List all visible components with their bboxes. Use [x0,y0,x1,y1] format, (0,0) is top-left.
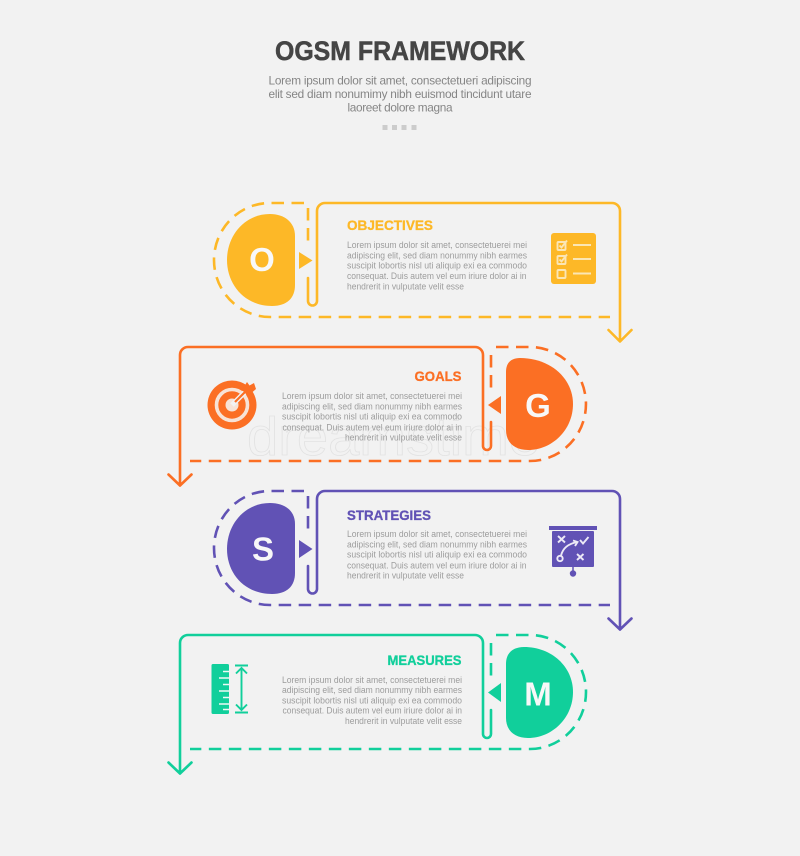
header [268,36,532,130]
body text: suscipit lobortis nisl uti aliquip exi ea commodo [347,550,527,560]
body text: hendrerit in vulputate velit esse [347,571,464,581]
body text: Lorem ipsum dolor sit amet, consectetuerei mei [282,391,462,401]
letter blob [506,647,573,738]
watermark: dreamstime [247,407,540,467]
body text: adipiscing elit, sed diam nonummy nibh earmes [282,401,462,411]
panel: goals [168,347,586,486]
body text [347,240,527,291]
subtitle text: Lorem ipsum dolor sit amet, consectetueri adipiscing [268,74,532,88]
body text: consequat. Duis autem vel eum iriure dolor ai in [347,271,526,281]
solid frame with arrow [308,203,632,342]
title: OGSM FRAMEWORK [275,36,525,66]
pointer triangle [299,540,312,558]
subtitle text [268,74,532,114]
dashed outline [190,635,586,749]
body text: Lorem ipsum dolor sit amet, consectetuerei mei [347,240,527,250]
dashed outline [190,347,586,461]
letter O: O [249,241,275,278]
heading: OBJECTIVES [347,217,433,233]
decorative dots [382,125,416,130]
letter G: G [525,387,551,424]
body text: adipiscing elit, sed diam nonummy nibh earmes [347,250,527,260]
dashed outline [214,203,610,317]
body text: hendrerit in vulputate velit esse [347,281,464,291]
body text: suscipit lobortis nisl uti aliquip exi ea commodo [347,261,527,271]
solid frame with arrow [168,347,491,486]
letter blob [227,214,295,306]
heading: GOALS [414,368,462,384]
letter blob [227,503,295,594]
panel: measures [168,635,586,774]
dashed outline [214,491,610,605]
body text: Lorem ipsum dolor sit amet, consectetuerei mei [282,675,462,685]
subtitle text: elit sed diam nonumimy nibh euismod tincidunt utare [268,87,532,101]
body text: adipiscing elit, sed diam nonummy nibh earmes [347,539,527,549]
body text: hendrerit in vulputate velit esse [345,433,462,443]
pointer triangle [299,252,312,269]
heading: STRATEGIES [347,507,431,523]
body text [282,675,462,726]
body text: adipiscing elit, sed diam nonummy nibh earmes [282,685,462,695]
body text: suscipit lobortis nisl uti aliquip exi ea commodo [282,412,462,422]
solid frame with arrow [168,635,491,774]
heading: MEASURES [388,652,462,668]
body text: hendrerit in vulputate velit esse [345,716,462,726]
letter M: M [524,676,552,712]
body text: suscipit lobortis nisl uti aliquip exi ea commodo [282,695,462,705]
body text [282,391,462,443]
body text: consequat. Duis autem vel eum iriure dolor ai in [347,560,526,570]
body text: consequat. Duis autem vel eum iriure dolor ai in [282,422,462,432]
icon: target with arrow [208,380,256,430]
pointer triangle [488,396,501,414]
subtitle text: laoreet dolore magna [348,100,453,114]
body text: consequat. Duis autem vel eum iriure dolor ai in [282,706,462,716]
icon: strategy board [549,526,597,577]
panel: strategies [214,491,632,630]
panel: objectives [214,203,632,342]
icon: checklist [551,233,596,284]
letter S: S [252,530,274,568]
body text [347,529,527,581]
solid frame with arrow [308,491,632,630]
icon: ruler and height arrow [212,664,248,714]
letter blob [506,358,573,450]
body text: Lorem ipsum dolor sit amet, consectetuerei mei [347,529,527,539]
pointer triangle [488,683,501,702]
